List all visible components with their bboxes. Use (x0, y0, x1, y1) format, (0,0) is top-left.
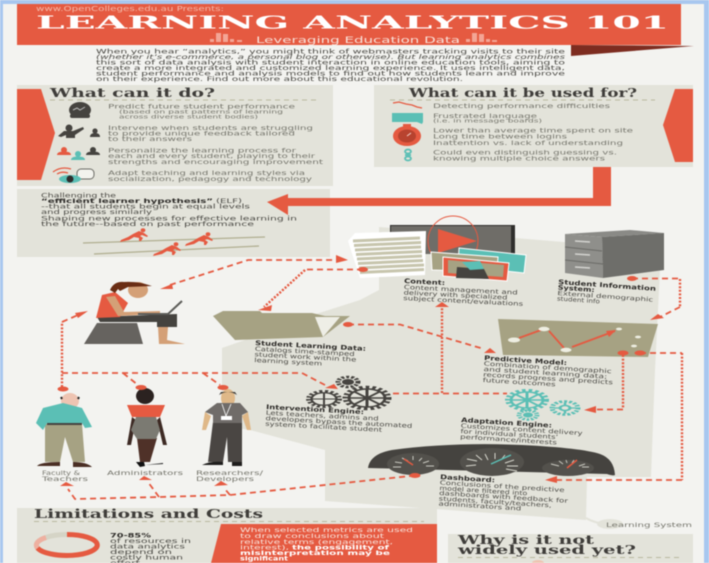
text: student information system: Student Information (558, 278, 657, 293)
text: guessing: Could even distinguish guessing vs. (433, 148, 617, 156)
callout: misinterpretation: When selected metrics are used (240, 526, 413, 534)
text: time on site: Inattention vs. lack of understanding (433, 139, 623, 147)
panel: what can it do (17, 85, 333, 186)
text: predict: Predict future student performance (108, 102, 295, 110)
text: student information system: System: (557, 284, 595, 294)
text: personalize: each and every student, playing to their (108, 152, 316, 160)
text: predict: (based on past patterns of learning (119, 110, 283, 116)
text: content: Content: (404, 277, 445, 287)
icon: student at laptop (84, 282, 185, 344)
text: time on site (433, 126, 633, 147)
text: adapt: socialization, pedagogy and technology (108, 175, 312, 183)
text: predict: across diverse student bodies) (119, 114, 258, 120)
text: student learning data: Catalogs time-stamped (255, 346, 355, 358)
text: resources statistic: 70-85% (110, 532, 152, 540)
intro paragraph (96, 48, 566, 83)
text: resources statistic: of resources in (110, 538, 191, 545)
labels: audience names: Teachers (40, 475, 89, 483)
labels: audience names: Developers (196, 475, 255, 483)
text: time on site: Lower than average time spent on site (433, 126, 633, 134)
text: adaptation engine (460, 416, 584, 448)
icon: filing cabinet (565, 230, 664, 278)
callout: misinterpretation: to draw conclusions about (240, 532, 385, 540)
icon: crystal ball (69, 102, 91, 118)
intro paragraph: create a more integrated and customized learning experience. It uses intelligent data, (96, 65, 565, 72)
icon: runners (120, 228, 213, 256)
text: content (403, 277, 524, 308)
icon: stacked photos (431, 248, 526, 281)
intro paragraph: this sort of data analysis with student interaction in online education tools, aiming to (96, 60, 566, 66)
intro paragraph: When you hear “analytics,” you might think of webmasters tracking visits to their site (96, 48, 566, 56)
icon: adaptation gears (508, 390, 578, 420)
text: intervene (108, 124, 313, 143)
text: adapt: Adapt teaching and learning styles via (108, 169, 305, 177)
icon: three students (57, 147, 100, 160)
text: predictive model: future outcomes (483, 377, 556, 388)
text: student information system (557, 278, 657, 309)
text: dashboard: students, faculty/teachers, (439, 495, 552, 509)
text: intervene: Intervene when students are struggling (108, 124, 313, 132)
icon: message bubble (392, 113, 423, 124)
icon: administrator figure (127, 388, 167, 467)
text: intervention engine: Intervention Engine: (266, 403, 364, 416)
icon: multiple choice circles (405, 150, 411, 160)
heading: why is it not widely used yet: Why is it not (456, 533, 595, 547)
text: student learning data: student work within the (254, 351, 357, 364)
text: resources statistic: depend on (110, 549, 172, 556)
text: hypothesis (41, 192, 297, 228)
text: detecting: Detecting performance difficulties (433, 102, 611, 110)
text: student information system: External demographic (557, 290, 653, 304)
text: adaptation engine: for individual students’ (460, 428, 559, 441)
text: intervention engine: Lets teachers, admins and (266, 410, 379, 423)
text: intervene: to provide unique feedback tailored (108, 130, 295, 138)
callout: misinterpretation: interest), (240, 544, 289, 552)
callout: misinterpretation: misinterpretation may be (240, 549, 391, 557)
labels: audience names: Faculty & (42, 469, 80, 477)
text: adaptation engine: Adaptation Engine: (461, 416, 552, 430)
text: content: delivery with specialized (403, 289, 508, 302)
text: hypothesis: Challenging the (41, 192, 116, 200)
text: dashboard: dashboards with feedback for (439, 490, 569, 505)
panel: what can it be used for (374, 85, 693, 167)
label: learning system: Learning System (606, 521, 692, 529)
icon: teacher and student (58, 124, 100, 138)
text: intervene: to their answers (108, 135, 193, 143)
connector arrow: used-for to hypothesis (267, 167, 611, 215)
text: hypothesis: --that all students begin at equal levels (41, 204, 250, 210)
text: hypothesis: (ELF) (216, 198, 242, 205)
text: resources statistic: data analytics (110, 544, 185, 550)
text: adaptation engine: performance/interests (460, 434, 557, 447)
title banner: www.OpenColleges.edu.au Presents: (36, 5, 224, 13)
text: frustrated language (433, 112, 542, 124)
text: personalize: strengths and encouraging improvement (108, 158, 324, 166)
text: predict (108, 102, 295, 120)
text: frustrated language: Frustrated language (433, 112, 537, 120)
label: learning system (586, 518, 692, 529)
text: resources statistic (110, 532, 191, 563)
text: content: Content management and (404, 284, 518, 297)
text: dashboard: model are filtered into (439, 485, 528, 497)
text: hypothesis: Shaping new processes for effective learning in (41, 216, 297, 222)
text: dashboard: administrators and (438, 500, 522, 513)
heading: what can it do: What can it do? (48, 86, 215, 100)
text: guessing (433, 148, 617, 162)
heading: why is it not widely used yet: widely used yet? (456, 543, 636, 557)
labels: audience names: Researchers/ (196, 469, 264, 477)
icon: figure head (532, 560, 544, 563)
text: predictive model: and student learning data; (483, 366, 607, 381)
labels: audience names: Administrators (107, 469, 184, 477)
panel: efficient learner hypothesis (17, 189, 330, 257)
icon: stopwatch (393, 124, 421, 146)
callout: misinterpretation: the possibility of (292, 544, 389, 552)
icon: student learning folder (213, 311, 350, 340)
icon: monitor with play button (390, 216, 515, 266)
text: hypothesis: and progress similarly (41, 209, 153, 216)
text: dashboard: Dashboard: (440, 473, 495, 484)
text: student learning data: learning system (254, 357, 322, 368)
text: adaptation engine: Customizes content delivery (461, 423, 583, 437)
text: time on site: Long time between logins (433, 132, 568, 140)
text: guessing: knowing multiple choice answers (433, 154, 606, 162)
chart: donut 70-85 percent (36, 534, 98, 556)
icon: wifi, hand and eye (53, 168, 94, 183)
intro paragraph: (whether it’s e-commerce, a personal blog or otherwise). But learning analytics combines (96, 54, 565, 61)
text: student learning data (254, 339, 366, 370)
text: personalize: Personalize the learning process for (108, 146, 297, 154)
heading: why is it not widely used yet (456, 533, 636, 557)
text: content: subject content/evaluations (403, 295, 523, 308)
intro paragraph: student performance and analysis models to find out how students learn and improve (96, 70, 566, 78)
text: personalize (108, 146, 324, 166)
text: intervention engine: developers bypass the automated (265, 415, 413, 430)
callout: misinterpretation: relative terms (engagement, (240, 538, 393, 546)
title banner: LEARNING ANALYTICS 101 (36, 12, 669, 34)
flow arrows: dashed routes (58, 255, 682, 499)
text: predictive model: Predictive Model: (484, 354, 567, 367)
text: predictive model: records progress and predicts (483, 371, 613, 386)
text: predictive model: Combination of demographic (484, 360, 612, 375)
text: dashboard (438, 473, 570, 515)
panel: limitations and costs (17, 507, 437, 563)
heading: limitations and costs: Limitations and Costs (34, 507, 263, 521)
learning system backdrop (222, 227, 660, 520)
callout: misinterpretation (211, 524, 437, 563)
heading: what can it be used for: What can it be used for? (408, 86, 637, 100)
text: dashboard: Conclusions of the predictive (440, 479, 565, 494)
text: predictive model (483, 354, 614, 392)
text: student learning data: Student Learning Data: (255, 339, 366, 353)
text: frustrated language: (i.e. in message boards) (433, 118, 542, 124)
text: intervention engine (265, 403, 413, 435)
text: adapt (108, 169, 312, 183)
icon: dashboard gauges (368, 444, 615, 476)
text: hypothesis: “efficient learner hypothesis” (41, 197, 213, 205)
intro paragraph: on their experience. Find out more about this educational revolution. (96, 76, 463, 83)
text: hypothesis: the future--based on past performance (41, 221, 255, 228)
icon: researcher figure (202, 389, 251, 466)
text: student information system: student info (557, 295, 600, 305)
text: resources statistic: costly human (110, 554, 183, 562)
callout: misinterpretation: significant (240, 554, 288, 562)
title banner: Leveraging Education Data (256, 36, 460, 46)
title banner (17, 4, 694, 56)
icon: intervention gears (309, 377, 388, 408)
icon: stack of papers (348, 231, 426, 278)
chart: predictive model (498, 319, 658, 357)
icon: faculty figure (36, 393, 92, 467)
text: intervention engine: system to facilitate student (265, 421, 383, 434)
labels: audience names (40, 469, 264, 483)
icon: falling trend line (393, 102, 422, 108)
panel: why is it not widely used yet (448, 533, 693, 563)
